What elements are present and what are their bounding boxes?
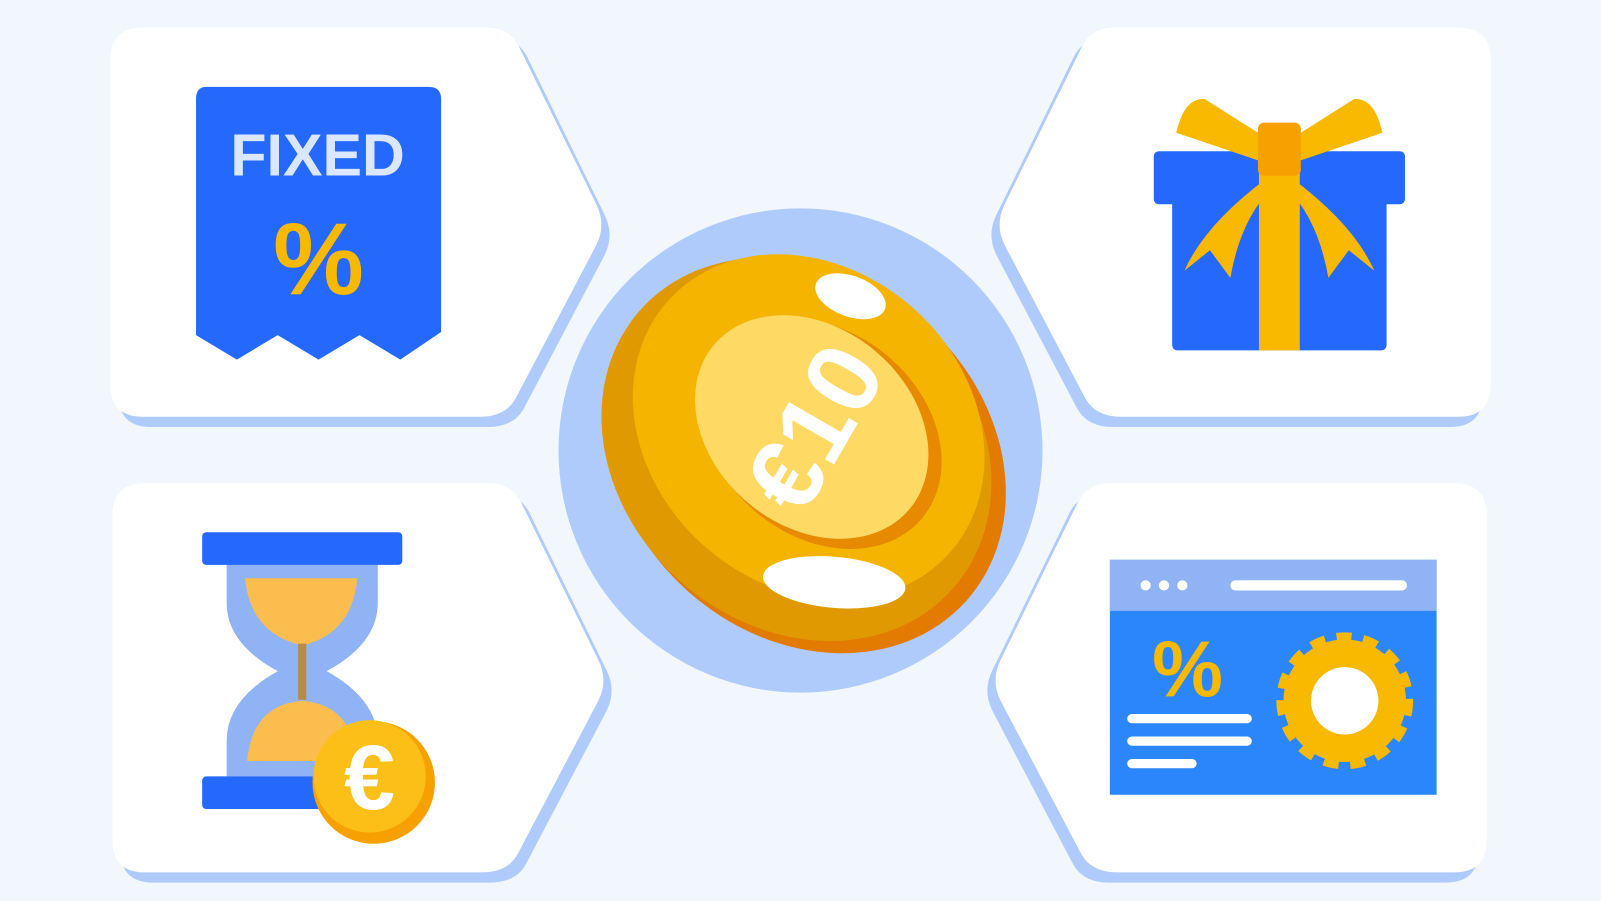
icon: euro 10 coin xyxy=(523,179,1086,734)
panel: time limit xyxy=(112,483,612,883)
icon: fixed tag: % xyxy=(273,202,364,316)
icon: fixed tag xyxy=(196,87,441,360)
icon: fixed tag: FIXED xyxy=(230,122,405,189)
center circle xyxy=(559,208,1042,693)
icon: browser window: % xyxy=(1152,625,1223,714)
icon: gift box xyxy=(1154,99,1405,350)
icon: hourglass with euro coin: € xyxy=(344,727,395,829)
panel: settings xyxy=(987,483,1487,883)
panel: fixed percent xyxy=(110,28,610,427)
icon: browser window xyxy=(1110,560,1437,795)
icon: euro 10 coin: €10 xyxy=(723,326,907,530)
icon: hourglass with euro coin xyxy=(202,532,435,844)
panel: gift xyxy=(991,28,1491,427)
